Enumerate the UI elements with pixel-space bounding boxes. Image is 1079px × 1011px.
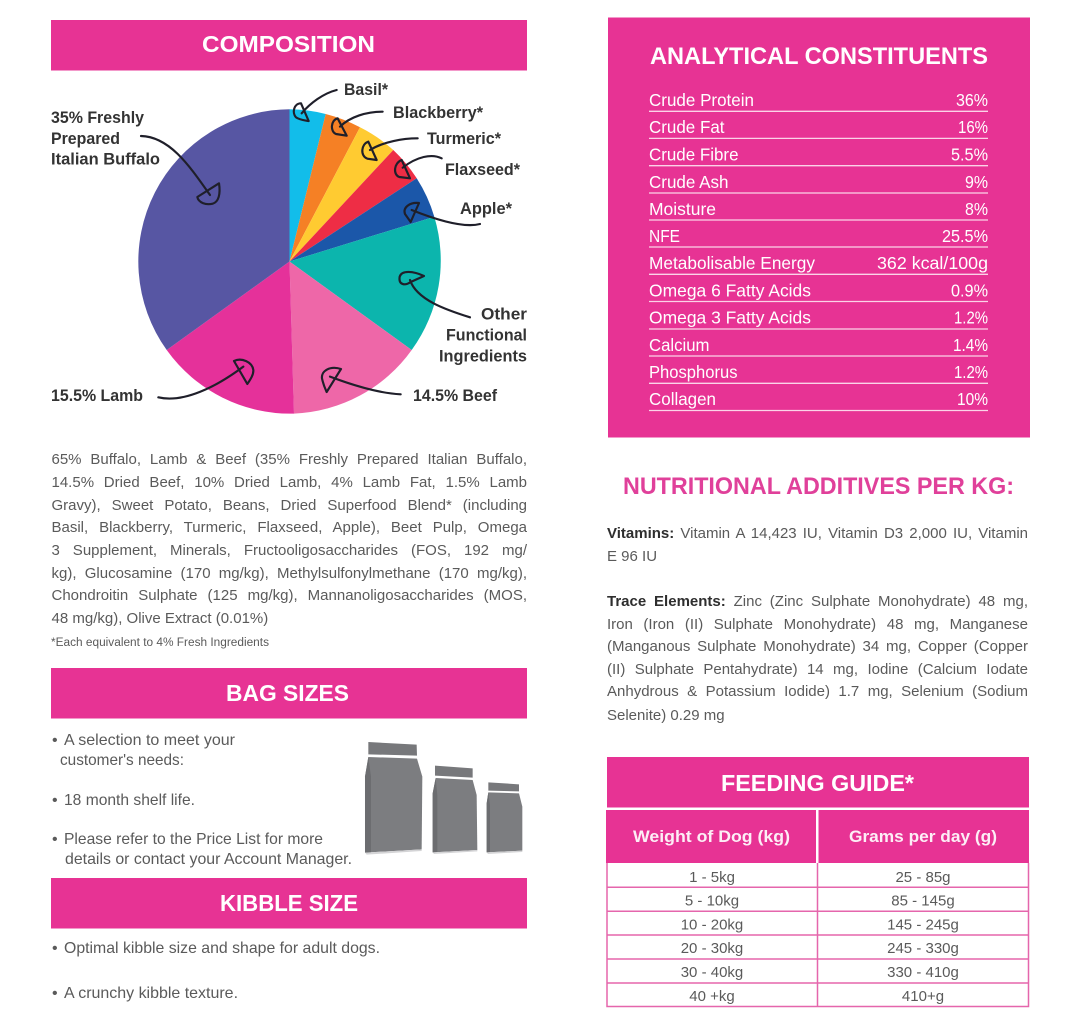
panel: bag sizes heading: BAG SIZES: [226, 680, 349, 706]
text: Gravy), Sweet Potato, Beans, Dried Superfood Blend* (including: [52, 496, 527, 514]
text: (Manganous Sulphate Monohydrate) 34 mg, Copper (Copper: [607, 638, 1028, 655]
bag sizes bullet list: •: [52, 792, 58, 809]
constituents table: 25.5%: [942, 226, 988, 246]
kibble size bullet list: [52, 940, 380, 1002]
table rows: 245 - 330g: [887, 940, 959, 957]
feeding guide heading: [607, 757, 1029, 808]
text: Anhydrous & Potassium Iodide) 1.7 mg, Selenium (Sodium: [607, 683, 1028, 700]
table grid: [607, 863, 1028, 1006]
pie labels: Ingredients: [439, 348, 527, 366]
pie labels: Functional: [446, 326, 527, 344]
table header: [606, 810, 1029, 863]
composition ingredients paragraph: [52, 451, 527, 626]
text: 14.5% Dried Beef, 10% Dried Lamb, 4% Lamb Fat, 1.5% Lamb: [52, 474, 527, 491]
constituents table: 36%: [956, 90, 988, 110]
table header: Grams per day (g): [849, 827, 997, 846]
pie labels: Prepared: [51, 130, 120, 148]
pie labels: Other: [481, 306, 528, 324]
table rows: 410+g: [902, 988, 944, 1005]
bag sizes bullet list: customer's needs:: [60, 752, 184, 769]
text: 48 mg/kg), Olive Extract (0.01%): [52, 610, 268, 626]
pie labels: Turmeric*: [427, 130, 502, 148]
pie labels: [51, 81, 528, 405]
constituents table: Crude Protein: [649, 90, 754, 110]
vitamins paragraph: [607, 525, 1028, 565]
table rows: 145 - 245g: [887, 916, 959, 934]
constituents table: Calcium: [649, 335, 710, 355]
constituents table: 1.2%: [954, 308, 988, 328]
kibble size bullet list: •: [52, 985, 58, 1002]
text: Vitamins: Vitamin A 14,423 IU, Vitamin D3 2,000 IU, Vitamin: [607, 525, 1028, 542]
pie labels: 14.5% Beef: [413, 387, 497, 405]
panel: feeding guide: [606, 757, 1029, 1006]
pie chart: composition: [138, 109, 441, 414]
text: (II) Sulphate Pentahydrate) 14 mg, Iodine (Calcium Iodate: [607, 660, 1028, 678]
constituents table: 8%: [965, 199, 988, 219]
text: Chondroitin Sulphate (125 mg/kg), Mannanoligosaccharides (MOS,: [52, 587, 527, 604]
constituents table: NFE: [649, 226, 680, 246]
pie labels: 15.5% Lamb: [51, 387, 143, 405]
panel: bag sizes heading: [51, 668, 527, 718]
constituents table: Collagen: [649, 389, 716, 409]
constituents table: Crude Fibre: [649, 144, 738, 164]
bag sizes bullet list: •: [52, 732, 58, 749]
constituents table: Crude Ash: [649, 172, 728, 192]
table rows: 40 +kg: [689, 988, 735, 1005]
constituents table: 0.9%: [951, 280, 988, 300]
constituents table: Omega 6 Fatty Acids: [649, 280, 811, 300]
constituents table: 10%: [957, 389, 988, 409]
table header: Weight of Dog (kg): [633, 827, 790, 846]
constituents table: 1.2%: [954, 362, 988, 382]
kibble size bullet list: •: [52, 940, 58, 957]
panel: composition heading: COMPOSITION: [202, 31, 375, 57]
constituents table: Crude Fat: [649, 117, 725, 137]
kibble size bullet list: A crunchy kibble texture.: [64, 985, 238, 1002]
kibble size bullet list: Optimal kibble size and shape for adult dogs.: [64, 940, 380, 957]
text: Iron (Iron (II) Sulphate Monohydrate) 48 mg, Manganese: [607, 616, 1028, 632]
table rows: [681, 869, 959, 1005]
text: 3 Supplement, Minerals, Fructooligosaccharides (FOS, 192 mg/: [52, 542, 527, 558]
bag sizes bullet list: A selection to meet your: [64, 732, 236, 749]
icon: three grey food bags: [365, 742, 522, 855]
constituents table: Moisture: [649, 199, 716, 219]
table rows: 10 - 20kg: [681, 916, 743, 934]
text: E 96 IU: [607, 548, 657, 565]
pie labels: Blackberry*: [393, 104, 484, 122]
bag sizes bullet list: Please refer to the Price List for more: [64, 831, 323, 848]
trace elements paragraph: [607, 593, 1028, 724]
constituents table: [649, 90, 988, 410]
table rows: 20 - 30kg: [681, 940, 743, 957]
text: Basil, Blackberry, Turmeric, Flaxseed, Apple), Beet Pulp, Omega: [52, 519, 527, 536]
constituents table: Omega 3 Fatty Acids: [649, 308, 811, 328]
panel: composition heading: [51, 20, 527, 70]
panel: kibble size heading: KIBBLE SIZE: [220, 890, 358, 916]
table rows: 25 - 85g: [895, 869, 951, 886]
bag sizes bullet list: details or contact your Account Manager.: [65, 851, 352, 868]
text: kg), Glucosamine (170 mg/kg), Methylsulfonylmethane (170 mg/kg),: [52, 564, 527, 582]
text: Trace Elements: Zinc (Zinc Sulphate Monohydrate) 48 mg,: [607, 593, 1028, 610]
constituents table: 362 kcal/100g: [877, 253, 988, 273]
footnote: *Each equivalent to 4% Fresh Ingredients: [51, 637, 269, 649]
pie labels: Italian Buffalo: [51, 150, 160, 168]
table rows: 5 - 10kg: [685, 892, 739, 910]
table rows: 30 - 40kg: [681, 964, 743, 981]
pie callout arrows: [141, 90, 480, 399]
constituents table: 1.4%: [953, 335, 988, 355]
bag sizes bullet list: •: [52, 831, 58, 848]
pie labels: Flaxseed*: [445, 161, 521, 179]
constituents table: 5.5%: [951, 144, 988, 164]
heading: analytical constituents: ANALYTICAL CONSTITUENTS: [650, 43, 988, 70]
constituents table: Phosphorus: [649, 362, 738, 382]
feeding guide heading: FEEDING GUIDE*: [721, 770, 914, 796]
constituents table: Metabolisable Energy: [649, 253, 815, 273]
heading: nutritional additives: NUTRITIONAL ADDITIVES PER KG:: [623, 473, 1014, 500]
constituents table: 9%: [965, 172, 988, 192]
bag sizes bullet list: [52, 732, 352, 868]
pie labels: Basil*: [344, 81, 389, 99]
panel: analytical constituents: [608, 18, 1030, 438]
constituents table: 16%: [958, 117, 988, 137]
panel: kibble size heading: [51, 878, 527, 928]
table rows: 330 - 410g: [887, 964, 959, 981]
pie labels: 35% Freshly: [51, 109, 145, 127]
text: Selenite) 0.29 mg: [607, 706, 725, 724]
bag sizes bullet list: 18 month shelf life.: [64, 792, 195, 809]
text: 65% Buffalo, Lamb & Beef (35% Freshly Prepared Italian Buffalo,: [52, 451, 527, 468]
pie labels: Apple*: [460, 200, 513, 218]
table rows: 85 - 145g: [891, 892, 955, 910]
table rows: 1 - 5kg: [689, 869, 735, 886]
